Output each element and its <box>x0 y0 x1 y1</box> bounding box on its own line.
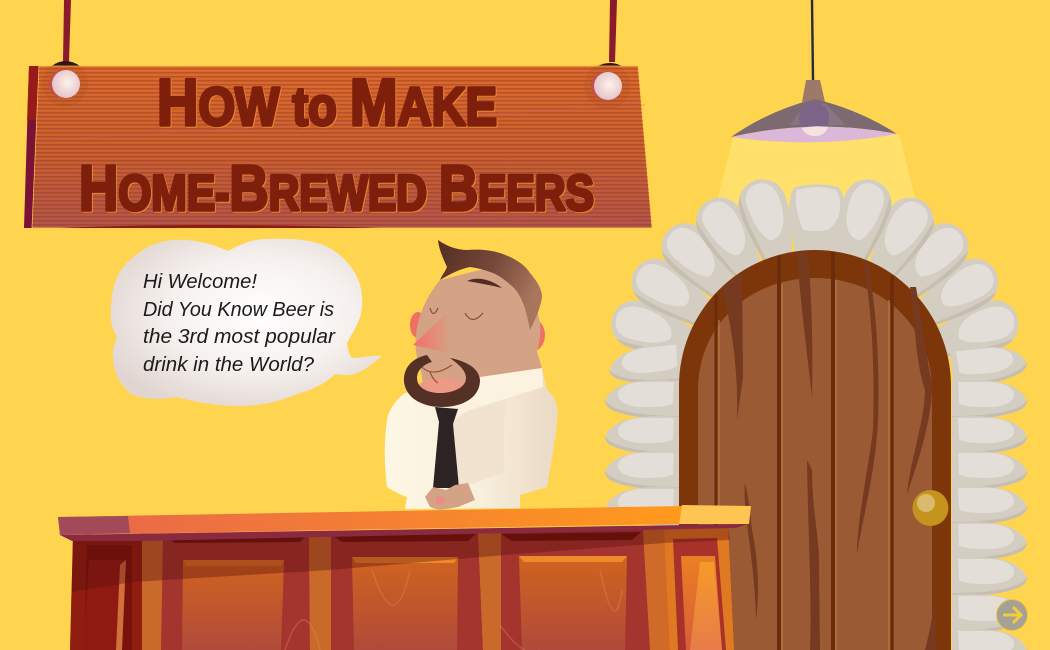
lamp cord <box>812 0 813 80</box>
left side stones <box>604 342 686 525</box>
wooden door <box>679 250 951 650</box>
panel 3 <box>478 529 650 650</box>
closed eyes <box>430 308 483 320</box>
light beam <box>716 134 917 205</box>
clasped hands <box>425 483 475 510</box>
shirt chest shading <box>452 396 507 488</box>
door plank grooves <box>716 252 892 650</box>
door knob <box>912 490 948 526</box>
hanging wooden sign <box>24 0 652 228</box>
counter underside <box>60 524 749 541</box>
bubble text: Did You Know Beer is <box>143 299 334 321</box>
ears and cheek <box>410 312 545 352</box>
speech bubble <box>111 239 382 406</box>
collar <box>462 368 543 410</box>
bubble text: Hi Welcome! <box>143 271 257 293</box>
arch stones <box>605 174 1025 366</box>
door panel <box>698 278 932 650</box>
bubble text: drink in the World? <box>143 354 315 376</box>
sign board <box>24 66 652 228</box>
door wood grain <box>722 252 936 650</box>
next arrow button <box>996 600 1028 630</box>
panel 1 <box>142 533 310 650</box>
nose <box>413 313 450 353</box>
lamp shade <box>731 99 897 137</box>
counter top <box>58 506 682 535</box>
right side stones <box>950 342 1029 650</box>
counter body <box>70 527 734 650</box>
head <box>416 265 542 396</box>
bubble text: the 3rd most popular <box>143 326 336 348</box>
door frame <box>679 250 951 650</box>
mouth <box>422 365 452 383</box>
stone arch <box>604 174 1029 650</box>
eyebrow <box>467 279 502 288</box>
panel 2 <box>309 531 483 650</box>
bar counter <box>58 505 751 650</box>
title: HOW to MAKE <box>157 65 497 139</box>
counter shadow <box>72 527 730 592</box>
hair <box>438 240 542 330</box>
beard <box>404 355 480 407</box>
hanging lamp <box>716 0 917 205</box>
wood grain <box>285 570 622 650</box>
chin <box>419 378 465 394</box>
right post <box>643 527 734 650</box>
bubble shape <box>111 239 382 406</box>
bubble text <box>143 271 336 376</box>
lamp underside and bulb <box>731 127 897 142</box>
title: HOME-BREWED BEERS <box>79 152 594 224</box>
sign nails <box>42 61 630 109</box>
sign ropes <box>52 0 622 66</box>
bartender <box>385 240 558 510</box>
title <box>79 65 594 224</box>
tie <box>433 407 459 488</box>
left post <box>70 536 142 650</box>
shirt <box>385 368 558 509</box>
lamp cap <box>802 80 825 102</box>
